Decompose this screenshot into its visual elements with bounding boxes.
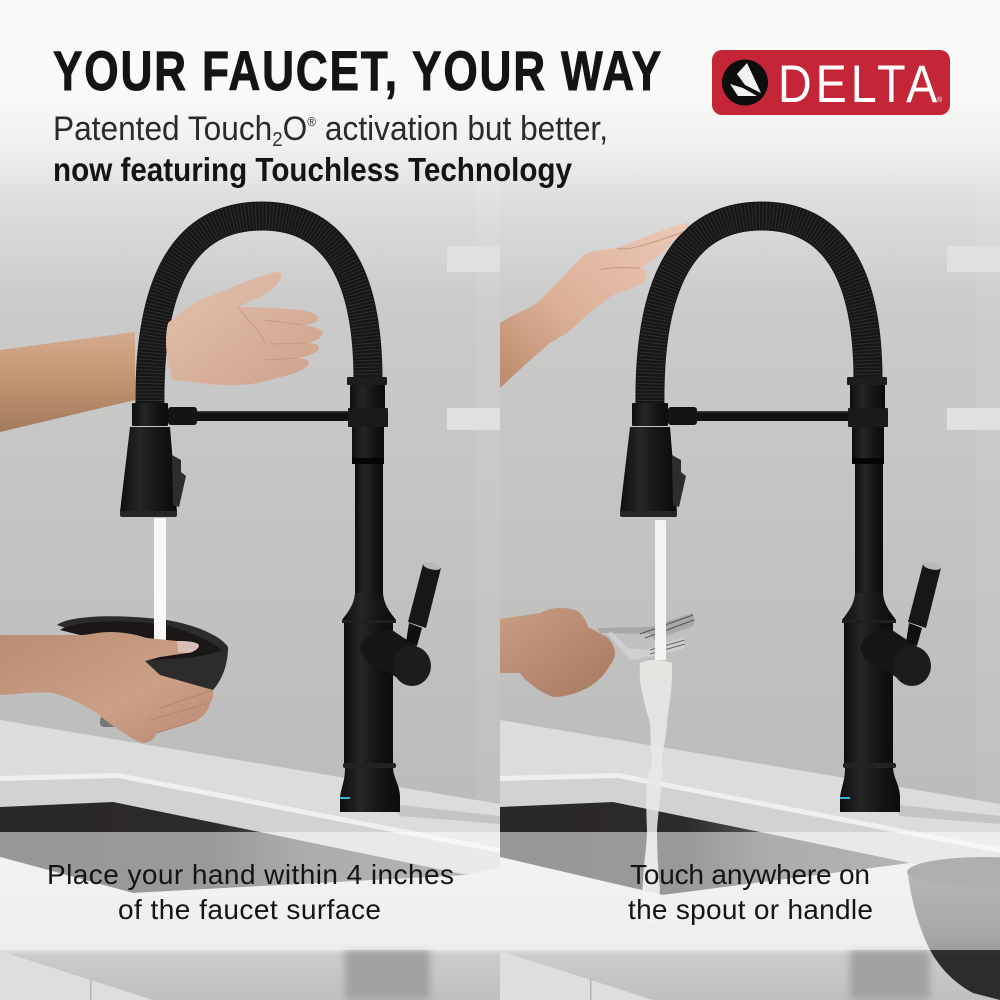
caption: left: Place your hand within 4 inches <box>47 859 454 890</box>
panel: right kitchen scene <box>500 0 1000 1000</box>
faucet left <box>120 216 442 812</box>
faucet right <box>620 216 942 812</box>
forks <box>597 613 695 660</box>
sink basin left <box>0 802 467 893</box>
counter front left <box>0 857 500 1000</box>
subtitle line 2: now featuring Touchless Technology <box>53 151 573 188</box>
subtitle line 1: ® <box>307 114 317 129</box>
subtitle line 1: activation but better, <box>316 110 608 148</box>
caption: right <box>628 859 873 925</box>
panel: left kitchen scene <box>0 0 500 1000</box>
hand: right touching spout <box>500 222 689 388</box>
caption: left: of the faucet surface <box>118 894 381 925</box>
registered mark: ® <box>937 96 943 104</box>
hand: right holding forks <box>500 608 615 697</box>
caption: right: the spout or handle <box>628 894 873 925</box>
logo wordmark: DELTA <box>778 54 938 114</box>
hand: left upper near faucet <box>0 272 323 432</box>
kitchen background right <box>500 0 1000 1000</box>
subtitle line 1: Patented Touch <box>53 110 289 148</box>
mixing bowl bottom right <box>907 857 1000 1000</box>
icon: Delta emblem <box>722 60 768 106</box>
bowl <box>57 616 228 727</box>
water stream left <box>154 518 166 640</box>
caption: left <box>47 859 454 925</box>
sink basin right <box>500 802 910 895</box>
logo: Delta <box>712 50 950 115</box>
title: YOUR FAUCET, YOUR WAY <box>53 39 661 102</box>
caption: right: Touch anywhere on <box>630 859 870 890</box>
subtitle line 1: 2 <box>272 129 283 151</box>
kitchen background left <box>0 0 500 1000</box>
counter front right <box>500 857 1000 1000</box>
hand: left holding bowl <box>0 632 213 743</box>
caption band <box>0 832 1000 950</box>
water stream right <box>640 520 672 925</box>
subtitle line 1: O <box>283 110 307 148</box>
